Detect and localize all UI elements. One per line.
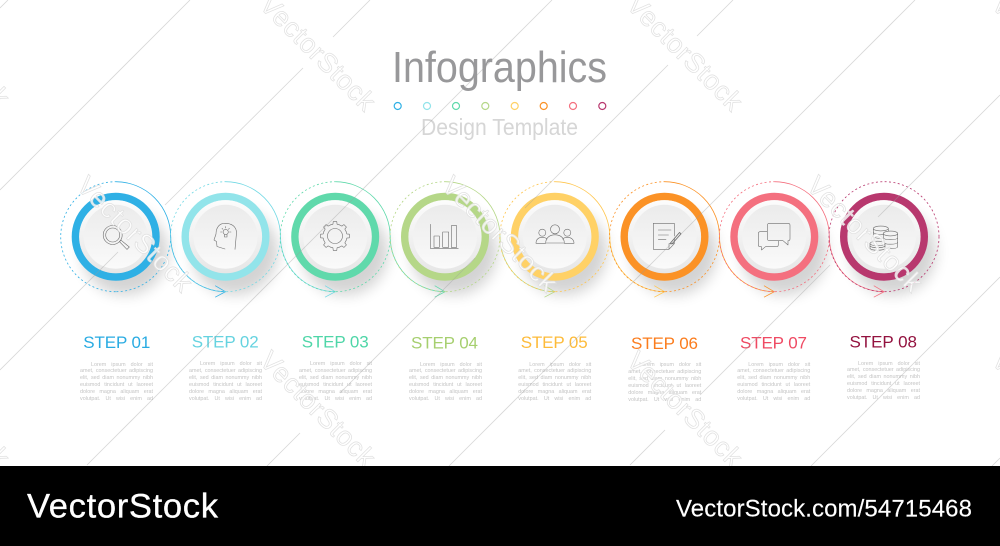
icon: head with light bulb	[214, 223, 236, 249]
footer image id: VectorStock.com/54715468	[676, 496, 972, 522]
step 7 circle	[719, 182, 884, 297]
icon: chat bubbles	[758, 223, 790, 250]
step 4 text: elit, sed diam nonummy nibh	[409, 375, 482, 381]
title: Infographics	[392, 43, 607, 92]
title colour dots	[394, 102, 606, 110]
step 8 text: elit, sed diam nonummy nibh	[847, 374, 920, 380]
icon: magnifier	[103, 226, 129, 249]
step 8 text: amet, consectetuer adipiscing	[847, 367, 920, 373]
step 5 text: amet, consectetuer adipiscing	[518, 368, 591, 374]
step 6 text: Lorem ipsum dolor sit	[639, 362, 701, 368]
step 5 text: Lorem ipsum dolor sit	[529, 362, 591, 368]
footer logo: VectorStock	[27, 488, 219, 526]
icon: people group	[536, 225, 574, 243]
step 3 text: elit, sed diam nonummy nibh	[299, 375, 372, 381]
step 6 text	[628, 362, 702, 403]
step 4 circle	[390, 182, 555, 297]
step headings: STEP 06	[631, 334, 698, 353]
step 2 text: elit, sed diam nonummy nibh	[189, 375, 262, 381]
step headings: STEP 03	[302, 333, 369, 352]
step 4 text: euismod tincidunt ut laoreet	[409, 382, 482, 388]
step 5 circle	[500, 182, 665, 297]
step 5 text: elit, sed diam nonummy nibh	[518, 375, 591, 381]
step 2 text: amet, consectetuer adipiscing	[189, 368, 262, 374]
step 7 text: euismod tincidunt ut laoreet	[737, 382, 810, 388]
step 5 text: dolore magna aliquam erat	[518, 389, 591, 395]
step 3 text	[299, 361, 372, 402]
icon: coin stacks	[870, 226, 898, 250]
step 4 text	[409, 362, 482, 402]
step 8 text: dolore magna aliquam erat	[847, 388, 920, 394]
step 2 text: Lorem ipsum dolor sit	[200, 361, 262, 367]
step 4 text: dolore magna aliquam erat	[409, 389, 482, 395]
step 8 text: euismod tincidunt ut laoreet	[847, 381, 920, 387]
step 7 text: amet, consectetuer adipiscing	[737, 368, 810, 374]
step 2 text: euismod tincidunt ut laoreet	[189, 382, 262, 388]
step 2 text	[189, 361, 262, 402]
step 1 text: volutpat. Ut wisi enim ad	[80, 396, 153, 402]
step 5 text: euismod tincidunt ut laoreet	[518, 382, 591, 388]
step headings: STEP 04	[411, 333, 478, 352]
step 7 text	[737, 362, 810, 402]
step headings: STEP 02	[192, 333, 259, 352]
step 1 text: amet, consectetuer adipiscing	[80, 368, 153, 374]
step headings: STEP 07	[740, 333, 807, 352]
step 8 text: volutpat. Ut wisi enim ad	[847, 395, 920, 401]
step 5 text	[518, 362, 592, 402]
step 1 circle	[61, 182, 225, 297]
step 6 text: euismod tincidunt ut laoreet	[628, 383, 701, 389]
watermarks: VectorStock	[254, 345, 382, 473]
step 1 text: euismod tincidunt ut laoreet	[80, 382, 153, 388]
step 7 text: dolore magna aliquam erat	[737, 389, 810, 395]
step 4 text: amet, consectetuer adipiscing	[409, 368, 482, 374]
watermarks: VectorStock	[621, 345, 749, 473]
step 1 text: Lorem ipsum dolor sit	[91, 362, 153, 368]
circle shadows	[82, 209, 936, 295]
watermarks: VectorStock	[801, 170, 929, 298]
step 3 text: dolore magna aliquam erat	[299, 389, 372, 395]
step 1 text: elit, sed diam nonummy nibh	[80, 375, 153, 381]
step 1 text: dolore magna aliquam erat	[80, 389, 153, 395]
step 6 text: elit, sed diam nonummy nibh	[628, 376, 701, 382]
step 2 circle	[171, 182, 335, 297]
step headings: STEP 05	[521, 333, 588, 352]
step 6 text: dolore magna aliquam erat	[628, 390, 701, 396]
step 3 text: amet, consectetuer adipiscing	[299, 368, 372, 374]
icon: gear	[321, 222, 349, 250]
watermarks: VectorStock	[436, 170, 564, 298]
step headings: STEP 01	[83, 333, 150, 352]
step 2 text: volutpat. Ut wisi enim ad	[189, 396, 262, 402]
step 8 text	[847, 360, 920, 401]
footer band	[0, 466, 1000, 546]
step 1 text	[80, 362, 153, 402]
step 2 text: dolore magna aliquam erat	[189, 389, 262, 395]
step 7 text: Lorem ipsum dolor sit	[748, 362, 810, 368]
step 7 text: volutpat. Ut wisi enim ad	[737, 396, 810, 402]
step 6 circle	[610, 182, 774, 297]
subtitle: Design Template	[421, 114, 578, 140]
watermarks: VectorStock	[71, 170, 199, 298]
step 3 text: Lorem ipsum dolor sit	[310, 361, 372, 367]
icon: document with pen	[653, 223, 681, 249]
step 6 text: volutpat. Ut wisi enim ad	[628, 397, 701, 403]
step 8 circle	[829, 182, 939, 292]
step 8 text: Lorem ipsum dolor sit	[858, 360, 920, 366]
step 3 text: euismod tincidunt ut laoreet	[299, 382, 372, 388]
step headings	[83, 332, 917, 353]
step 5 text: volutpat. Ut wisi enim ad	[518, 396, 591, 402]
step 3 circle	[280, 182, 445, 297]
step 4 text: Lorem ipsum dolor sit	[420, 362, 482, 368]
step 7 text: elit, sed diam nonummy nibh	[737, 375, 810, 381]
step 6 text: amet, consectetuer adipiscing	[628, 369, 701, 375]
icon: bar chart	[430, 224, 458, 248]
step 3 text: volutpat. Ut wisi enim ad	[299, 396, 372, 402]
step headings: STEP 08	[850, 332, 917, 351]
step 4 text: volutpat. Ut wisi enim ad	[409, 396, 482, 402]
